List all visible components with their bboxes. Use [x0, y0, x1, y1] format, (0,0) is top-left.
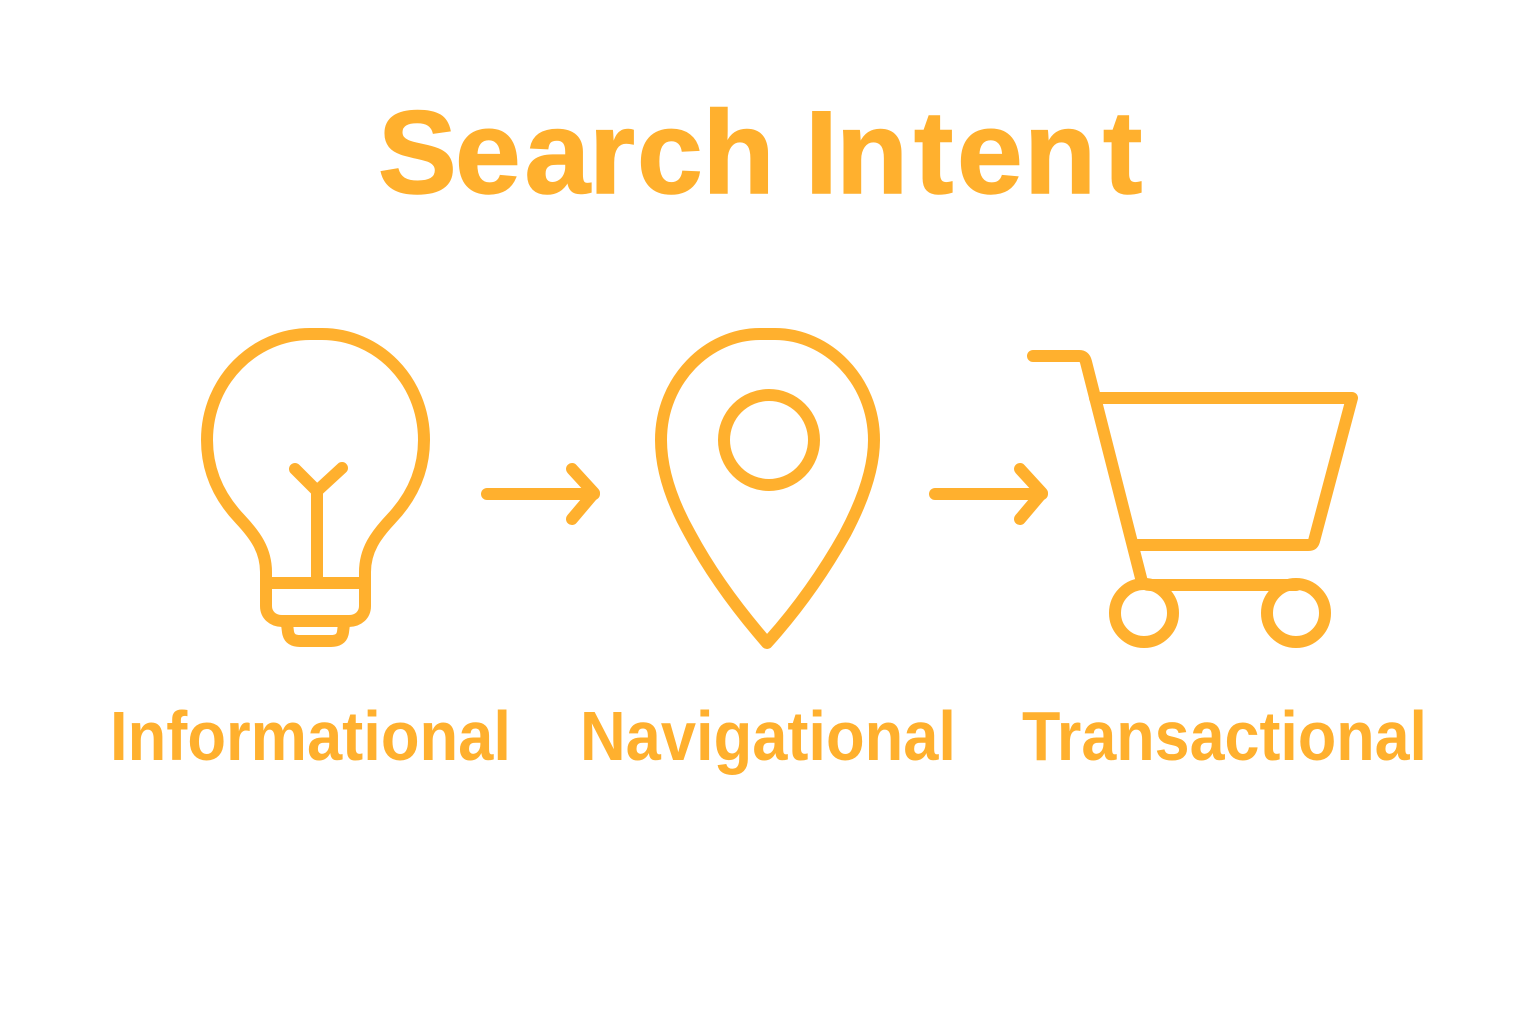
arrow: navigational to transactional: [935, 469, 1042, 519]
icon: light bulb: [207, 334, 424, 641]
title: Search Intent: [378, 87, 1142, 219]
label: Transactional: Transactional: [1022, 697, 1427, 775]
label: Navigational: Navigational: [580, 697, 956, 775]
icon: shopping cart: [1033, 356, 1352, 642]
arrow: informational to navigational: [487, 469, 594, 519]
icon: location pin: [661, 334, 874, 643]
label: Informational: Informational: [110, 697, 511, 775]
